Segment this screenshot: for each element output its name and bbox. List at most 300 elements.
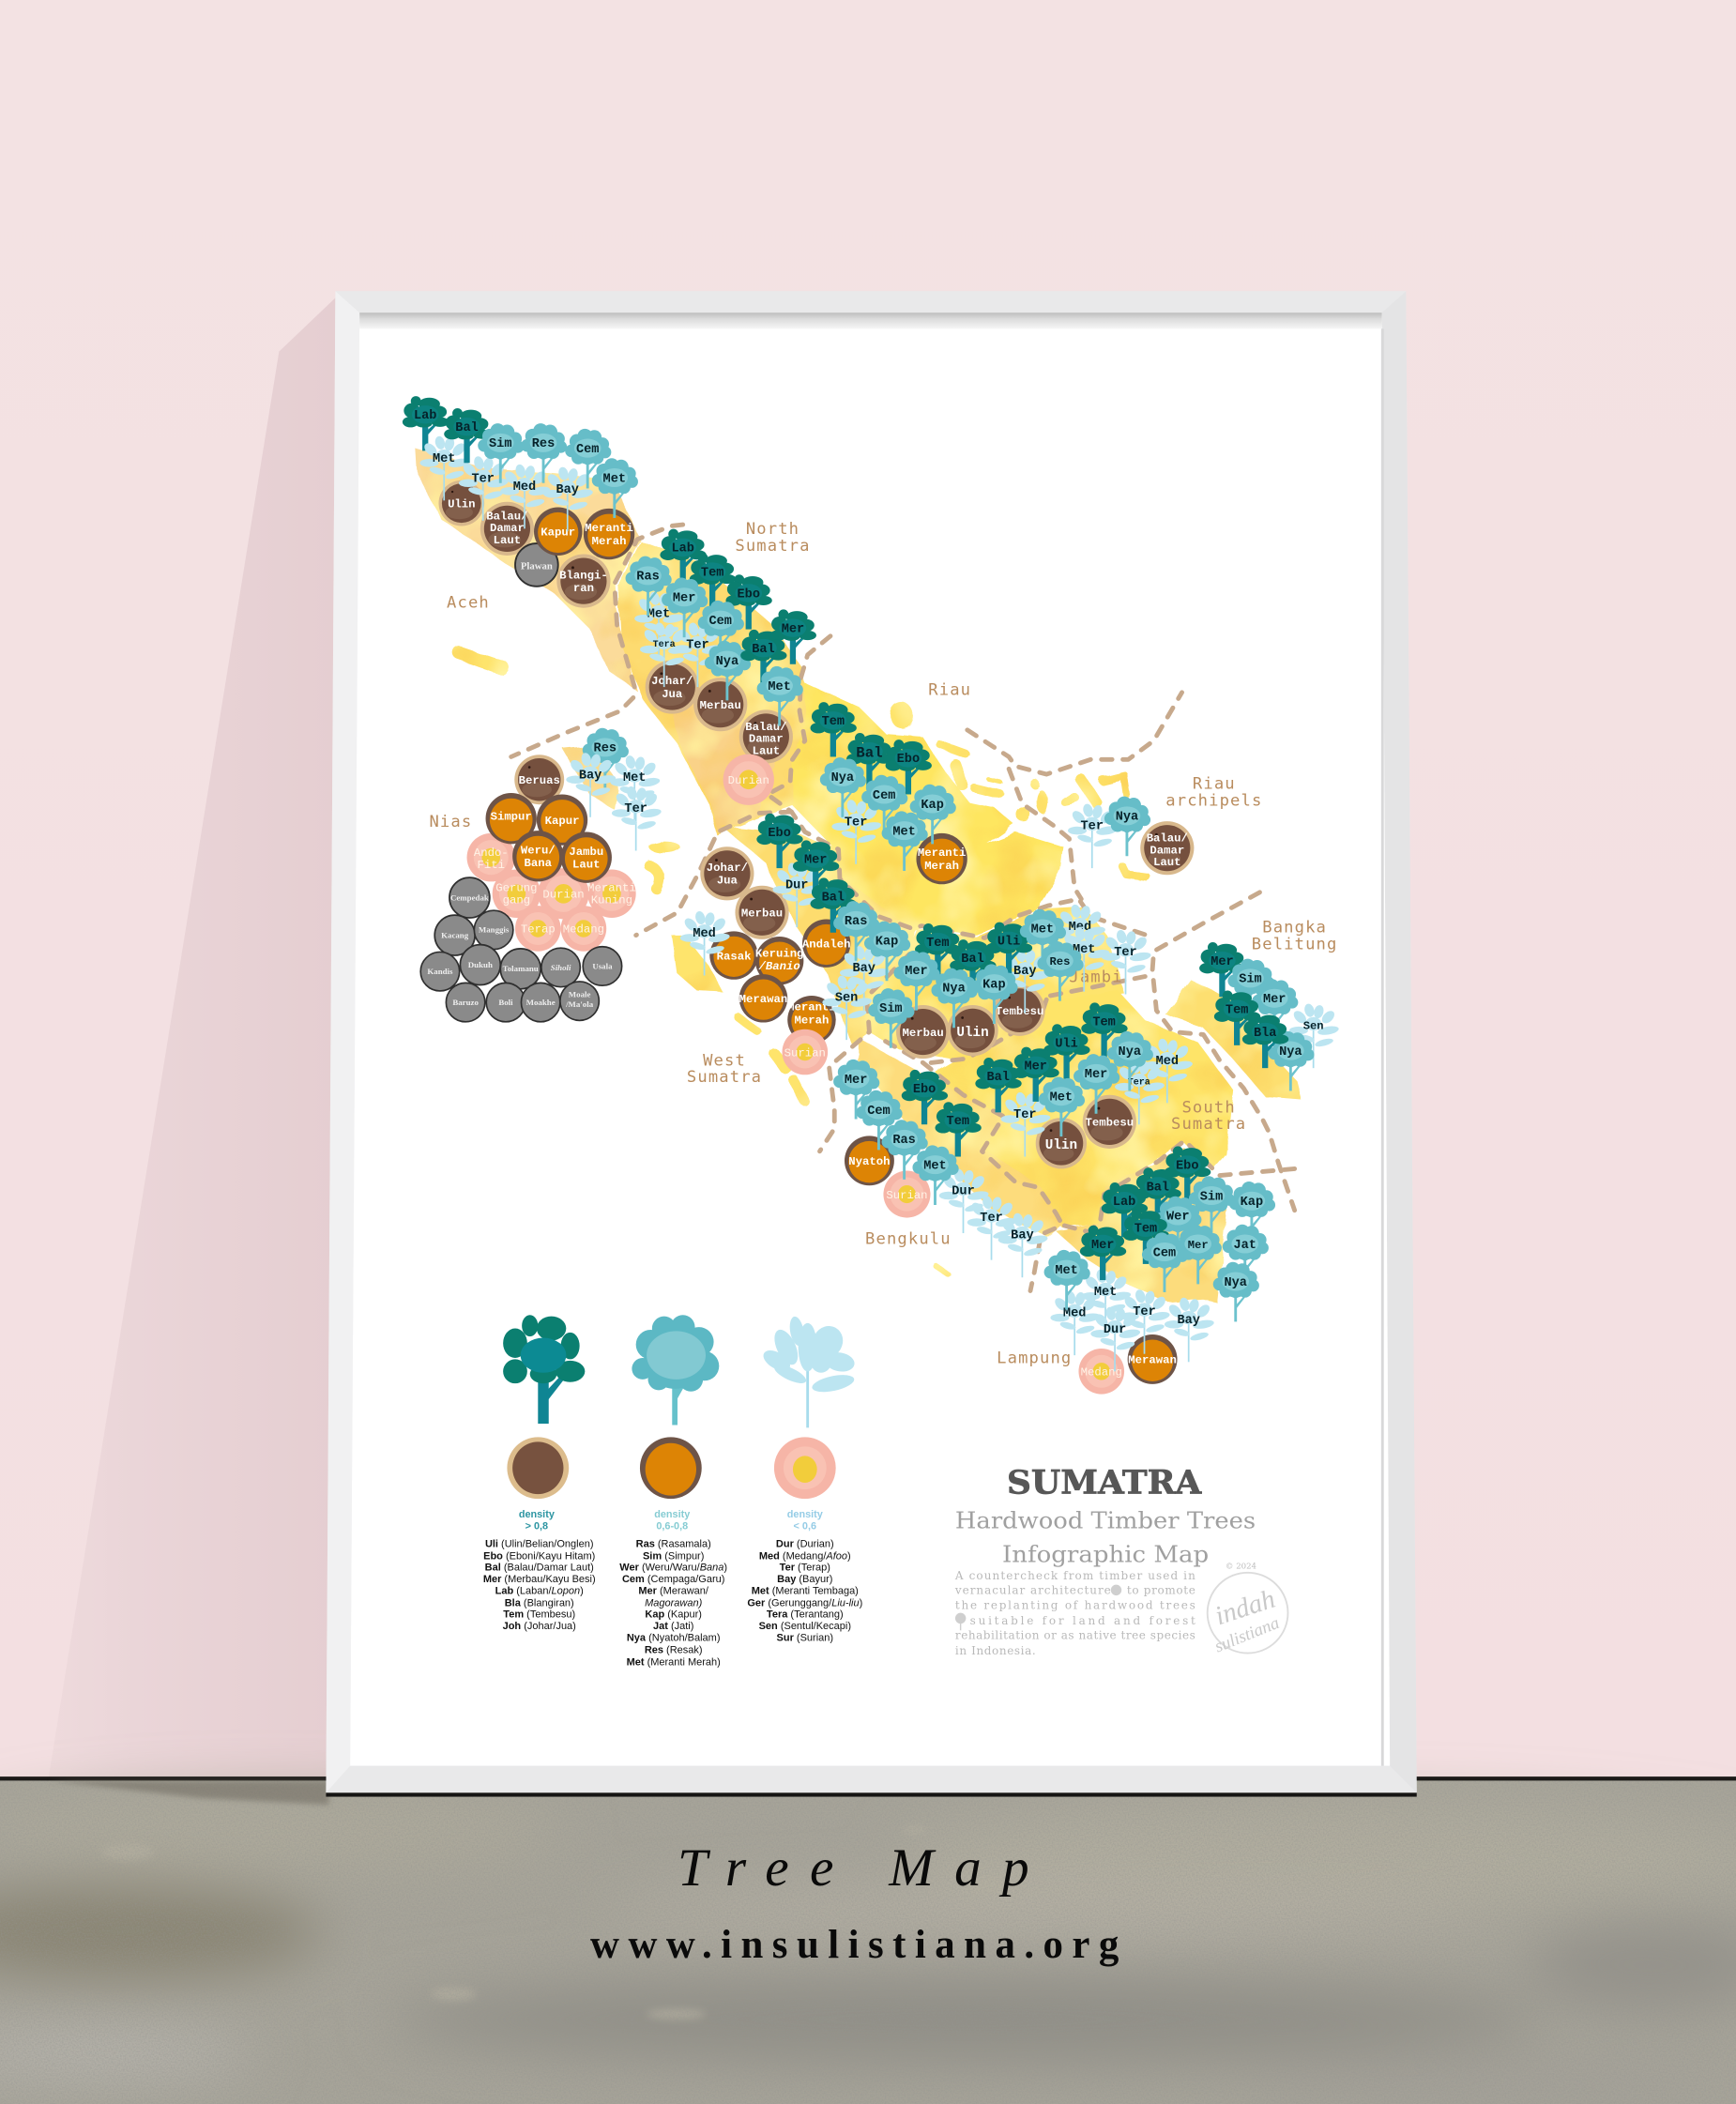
tree: Bay: Bay [556,483,579,497]
artist logo: indah [1211,1585,1279,1631]
disc: Nyatoh: Nyatoh [848,1155,891,1168]
tree: Cem: Cem [867,1105,891,1119]
disc: Ulin [439,480,484,526]
disc: Balau/Damar Laut [1140,821,1194,875]
tree: Ter [612,785,662,851]
disc: Keruing/Banio [755,937,803,985]
tree: Dur: Dur [1104,1323,1126,1337]
tree: Ebo: Ebo [768,827,791,841]
tree: Bay [566,752,617,817]
tree: Cem: Cem [576,443,599,457]
tree: Bla: Bla [1254,1027,1276,1041]
disc: Meranti Merah: Meranti [918,846,966,860]
description paragraph: in Indonesia. [955,1644,1036,1657]
tree: Mer: Mer [782,622,804,636]
land: South Sumatra [937,992,1231,1225]
tree: Met: Met [1073,943,1095,957]
disc: Meranti Merah [787,996,836,1044]
tree: Met [592,458,638,518]
description paragraph: suitable for land and forest [970,1614,1195,1627]
tree: Wer [1155,1197,1201,1256]
poster frame [326,291,1417,1797]
label: Aceh: Aceh [447,594,490,613]
tree: Met: Met [768,680,791,694]
tree: Uli [986,922,1032,977]
tree: Bal [740,630,787,684]
tree: Kap [864,922,910,981]
disc: Moale/Ma'ola [560,982,599,1020]
species list: low density: Sen (Sentul/Kecapi) [759,1621,851,1632]
label: Riau archipels: Riau [1193,775,1236,794]
disc: Gerunggang: Gerung [495,881,538,894]
disc: Meranti Merah [916,833,967,884]
disc: Kapur: Kapur [541,526,575,540]
tree: Tem [690,553,736,608]
disc: Merawan: Merawan [739,993,787,1006]
tree: Tem: Tem [947,1115,969,1129]
region labels [429,520,1337,1368]
tree: Mer [662,578,708,637]
label: North Sumatra: Sumatra [735,537,811,556]
legend heading: density below 0.6: < 0,6 [794,1520,816,1532]
label: Riau: Riau [928,681,971,700]
artist logo: © 2024 [1226,1562,1257,1571]
tree: Mer: Mer [1085,1068,1107,1082]
tree: Ebo: Ebo [1176,1159,1198,1173]
disc: Tembesu [994,985,1045,1036]
tree: Cem: Cem [873,789,895,803]
land: Jambi [869,909,1121,1058]
disc: Andaleh: Andaleh [802,938,850,951]
disc: Jambu Laut [561,832,612,883]
legend [483,1315,862,1668]
disc: Durian: Durian [542,889,585,902]
tree: Tem [1214,991,1260,1045]
disc: Weru/Bana: Weru/ [521,844,556,857]
species list: medium density: Magorawan) [645,1598,703,1609]
tree: Lab [660,529,707,584]
disc: Tembesu: Tembesu [996,1005,1043,1018]
disc: Kandis: Kandis [427,967,453,976]
tree: Dur [939,1167,989,1233]
tree: Met [757,666,803,726]
species list: low density: Sur (Surian) [777,1633,833,1644]
tree: Cem [565,429,611,488]
tree: Nya [705,641,751,700]
tree: Mer: Mer [1188,1239,1209,1252]
tree: Jat [1223,1225,1269,1284]
tree: Dur: Dur [952,1185,975,1199]
tree: Ter: Ter [624,802,647,816]
disc: Surian [883,1171,930,1218]
tree: Tem [1123,1210,1169,1264]
tree: Bay: Bay [579,769,602,783]
species list: medium density: Sim (Simpur) [643,1550,704,1562]
tree: Ebo: Ebo [738,587,760,602]
group: Aceh discs and trees [403,396,638,608]
species list: low density: Met (Meranti Tembaga) [752,1586,859,1597]
disc: Tembesu: Tembesu [1086,1117,1134,1130]
disc: Andaleh [802,919,850,968]
disc: Merbau: Merbau [903,1027,944,1040]
tree: Med [680,910,730,975]
label: North Sumatra: North [746,520,799,539]
tree: Bay [998,1212,1048,1277]
tree: Mer [1176,1225,1222,1284]
disc: Johar/Jua: Jua [717,875,739,888]
tree: Met: Met [923,1159,947,1173]
disc: Medang [561,906,606,952]
disc: Meranti Merah: Meranti [585,522,633,535]
disc: Baruzo [446,983,485,1022]
tree: Mer [793,840,839,895]
disc: Ando-Fiti: Fiti [478,859,505,872]
tree: Nya: Nya [831,771,854,785]
tree: Ebo [1165,1146,1211,1201]
legend tree: high density [503,1315,585,1424]
tree: Bal: Bal [986,1071,1010,1085]
tree: Sim [868,988,914,1048]
disc: Manggis: Manggis [479,925,510,935]
tree: Ebo: Ebo [897,753,920,767]
label: Riau archipels: archipels [1165,792,1262,811]
description paragraph [954,1569,1195,1657]
species list: high density: Tem (Tembesu) [503,1609,575,1621]
tree: Mer: Mer [1024,1060,1047,1075]
disc: Jambu Laut: Jambu [569,846,603,859]
description paragraph: to promote [1127,1584,1195,1597]
disc: Balau/Damar Laut: Damar [749,733,784,746]
disc: Medang: Medang [1081,1366,1122,1380]
islands [460,653,1147,1276]
concrete floor [0,1776,1736,2104]
label: Bangka Belitung: Belitung [1252,936,1337,954]
tree: Met [611,755,661,820]
disc: Weru/Bana [512,831,563,881]
group: South Sumatra discs and trees [975,1002,1194,1168]
tree: Ras: Ras [892,1134,916,1148]
tree: Tem [811,702,857,756]
tree: Ras [833,901,879,961]
tree: Mer [1199,942,1245,997]
disc: Meranti Merah: Merah [795,1014,829,1027]
disc: Blangiran: ran [573,582,594,595]
tree: Med [1143,1038,1194,1103]
tree: Bay: Bay [852,962,876,976]
label: South Sumatra: South [1181,1098,1236,1117]
disc: Kapur [534,507,582,556]
tree: Sen: Sen [1303,1020,1324,1033]
species list: high density: Lab (Laban/Lopon) [495,1586,584,1597]
disc: Plawan [515,543,558,587]
tree: Nya: Nya [942,983,966,997]
tree: Met: Met [623,771,646,785]
tree: Med: Med [1069,921,1091,935]
tree: Sen: Sen [835,992,858,1006]
tree: Ter [459,455,509,521]
land: Bangka [1168,983,1299,1098]
tree: Bay: Bay [1011,1229,1034,1243]
species list: low density: Tera (Terantang) [767,1609,844,1621]
species list: medium density: Jat (Jati) [653,1621,693,1632]
tree: Kap [1229,1182,1275,1242]
tree: Cem [1142,1232,1188,1292]
disc: Meranti Kuning: Kuning [591,893,632,907]
disc: Merbau: Merbau [700,699,741,712]
tree: Med [500,464,551,528]
disc: Durian [723,755,774,805]
legend disc: medium density [640,1437,702,1499]
disc: Plawan: Plawan [521,560,553,572]
tree: Sen [822,974,873,1040]
species list: high density: Uli (Ulin/Belian/Onglen) [485,1539,594,1550]
tree: Ter: Ter [1081,820,1104,834]
tree: Lab: Lab [414,409,436,423]
disc: Balau/Damar Laut: Damar [490,522,525,535]
tree: Med: Med [513,480,536,495]
tree: Bla [1242,1014,1288,1068]
tree: Met: Met [1050,1090,1073,1105]
legend heading: density 0.6-0.8: 0,6-0,8 [656,1520,688,1532]
disc: Surian [783,1029,828,1075]
tree: Met: Met [892,825,916,839]
disc: Meranti Merah: Merah [592,535,627,548]
tree: Tem [935,1102,982,1157]
tree: Ter: Ter [471,472,495,486]
tree: Nya [820,757,866,817]
disc: Johar/Jua [700,846,754,900]
tree: Ter [831,799,882,864]
tree: Sim [1227,959,1274,1018]
disc: Johar/Jua [646,660,699,714]
tree: Ter: Ter [1013,1108,1036,1122]
tree: Mer [1080,1226,1126,1280]
species list: high density: Bla (Blangiran) [505,1598,574,1609]
legend heading: density above 0.8: > 0,8 [525,1520,548,1532]
title block [954,1464,1287,1657]
tree: Met [634,591,685,656]
tree: Ebo: Ebo [913,1083,936,1097]
tree: Ter: Ter [845,816,867,830]
tree: Met: Met [1055,1264,1078,1278]
disc: Weru/Bana: Bana [525,857,553,870]
disc: Siholi [541,948,580,987]
tree: Bal: Bal [856,744,883,761]
group: Bangka Belitung trees [1199,942,1339,1090]
tree: Sim: Sim [879,1002,903,1016]
group: Lampung discs and trees [1044,1146,1275,1395]
species list: low density: Bay (Bayur) [777,1574,832,1585]
disc: Johar/Jua: Johar/ [707,861,748,875]
tree: Mer [1074,1054,1119,1114]
tree: Res: Res [594,742,617,756]
tree: Res [1037,941,1084,1001]
tree: Kap [910,785,956,844]
tree: Cem: Cem [709,615,732,629]
tree: Tem [1081,1002,1128,1058]
disc: Ulin: Ulin [448,497,476,511]
disc: Ulin [1036,1118,1087,1168]
group: Riau archipelago [1068,797,1194,875]
disc: Durian: Durian [728,774,769,787]
tree: Mer: Mer [1211,955,1234,969]
disc: Rasak [709,931,758,980]
tree: Med: Med [693,927,716,941]
tree: Uli: Uli [1055,1037,1078,1051]
disc: Merawan [1128,1334,1178,1384]
tree: Ras [626,556,672,616]
legend disc: high density [507,1437,569,1499]
disc: Ulin [947,1005,998,1056]
species list: low density: Ter (Terap) [780,1563,830,1574]
disc: Surian: Surian [886,1189,928,1202]
species list: high density: Ebo (Eboni/Kayu Hitam) [483,1550,595,1562]
tree: Tera: Tera [653,640,676,650]
disc: Keruing/Banio: /Banio [758,960,800,973]
disc: Siholi: Siholi [551,963,571,972]
tree: Bal: Bal [961,953,984,967]
disc: Merbau [735,886,789,939]
tree: Nya [1213,1262,1259,1321]
label: West Sumatra: West [703,1051,746,1070]
disc: Medang: Medang [563,923,604,937]
tree: Cem [856,1090,903,1150]
group: North Sumatra discs and trees [626,529,816,805]
disc: Moakhe: Moakhe [526,998,556,1007]
species list: high density: Mer (Merbau/Kayu Besi) [483,1574,596,1585]
disc: Cempedak [449,877,490,918]
disc: Kacang [434,915,475,955]
disc: Meranti Merah: Meranti [787,1001,836,1014]
tree: Dur: Dur [785,879,808,893]
disc: Tembesu [1083,1095,1136,1149]
disc: Balau/Damar Laut: Balau/ [1147,832,1188,846]
description paragraph: vernacular architecture [954,1584,1111,1597]
disc: Moale/Ma'ola: /Ma'ola [565,999,594,1009]
disc: Meranti Kuning [587,870,636,918]
disc: Balau/Damar Laut: Laut [753,745,780,758]
disc: Meranti Kuning: Meranti [587,881,636,894]
subtitle line 2: Infographic Map [1002,1540,1209,1567]
species list: medium density [619,1539,727,1668]
tree: Met [1020,909,1066,968]
disc: Balau/Damar Laut: Balau/ [745,721,786,734]
tree: Bay: Bay [1013,965,1036,979]
tree: Uli: Uli [997,936,1020,950]
label: Nias: Nias [429,813,472,831]
disc: Balau/Damar Laut: Balau/ [486,510,528,523]
disc: Balau/Damar Laut: Laut [494,534,521,547]
legend tree: low density [760,1316,856,1427]
tree: Mer: Mer [673,592,695,606]
label: Lampung: Lampung [997,1349,1072,1368]
land: Lampung [1059,1151,1225,1301]
tree: Med: Med [1063,1307,1086,1321]
disc: Meranti Merah: Merah [924,860,959,873]
disc: Tolamanu [500,949,541,989]
disc: Tolamanu: Tolamanu [503,964,539,973]
species list: low density: Med (Medang/Afoo) [759,1550,851,1562]
tree: Lab [403,396,449,450]
disc: Dukuh [460,945,500,985]
disc: Kacang: Kacang [441,930,469,939]
tree: Lab: Lab [671,542,694,556]
tree: Cem [861,775,907,834]
tree: Mer [1252,979,1298,1039]
tree: Nya: Nya [1119,1045,1141,1060]
map: land masses [418,450,1299,1301]
tree: Tem: Tem [1092,1015,1116,1029]
tree: Ter: Ter [1114,946,1137,960]
tree: Bal: Bal [752,643,775,657]
species list: medium density: Kap (Kapur) [645,1609,702,1621]
disc: Keruing/Banio: Keruing [755,947,803,960]
species list: medium density: Res (Resak) [645,1645,703,1656]
description paragraph: A countercheck from timber used in [954,1569,1195,1582]
tree: Ras: Ras [845,915,867,929]
land: West Sumatra [728,830,912,1044]
tree: Tem: Tem [1226,1004,1248,1018]
tree: Bay [543,466,593,531]
disc: Kapur: Kapur [545,815,579,828]
disc: Balau/Damar Laut [739,709,793,764]
group: West Sumatra discs and trees [680,814,910,1075]
tree: Nya [1107,1031,1153,1090]
disc: Merbau [693,678,747,731]
caption: website: www.insulistiana.org [590,1923,1119,1967]
description paragraph: the replanting of hardwood trees [955,1598,1195,1611]
label: South Sumatra: Sumatra [1171,1115,1246,1134]
disc: Ando-Fiti [467,833,515,881]
artist logo: sulistiana [1212,1613,1282,1656]
tree: Med [1050,1289,1101,1355]
tree: Met: Met [603,472,626,486]
tree: Ebo [902,1070,948,1124]
title: SUMATRA: SUMATRA [1007,1464,1202,1502]
land: Aceh [418,450,637,686]
tree: Bal [1135,1167,1181,1223]
disc: Manggis [474,910,513,950]
tree: Jat: Jat [1234,1239,1256,1253]
disc: Ulin: Ulin [956,1026,989,1041]
tree: Ebo [725,574,772,630]
tree: Tera [640,621,690,687]
tree: Nya [931,968,978,1028]
disc: Kapur [537,794,587,846]
tree: Sim [478,423,524,483]
tree: Mer: Mer [845,1074,867,1088]
disc: Surian: Surian [784,1046,826,1060]
tree: Kap [971,964,1018,1024]
disc: Simpur [486,793,537,844]
tree: Bay [840,945,890,1011]
tree: Ras [882,1120,928,1180]
tree: Bay: Bay [1177,1314,1200,1328]
tree: Ebo [886,739,932,794]
species list: high density: Joh (Johar/Jua) [503,1621,576,1632]
tree: Res: Res [1050,955,1070,968]
tree: Nya: Nya [1279,1045,1302,1060]
tree: Lab [1102,1182,1148,1237]
tree: Nya [1268,1031,1315,1090]
disc: Blangiran: Blangi- [559,569,608,582]
tree: Sim: Sim [1200,1190,1223,1204]
disc: Gerunggang [493,870,541,918]
group: Bengkulu discs and trees [833,1060,1048,1277]
frame shadow on wall [48,297,335,1779]
tree: Bal [846,733,892,787]
tree: Kap: Kap [921,799,944,813]
